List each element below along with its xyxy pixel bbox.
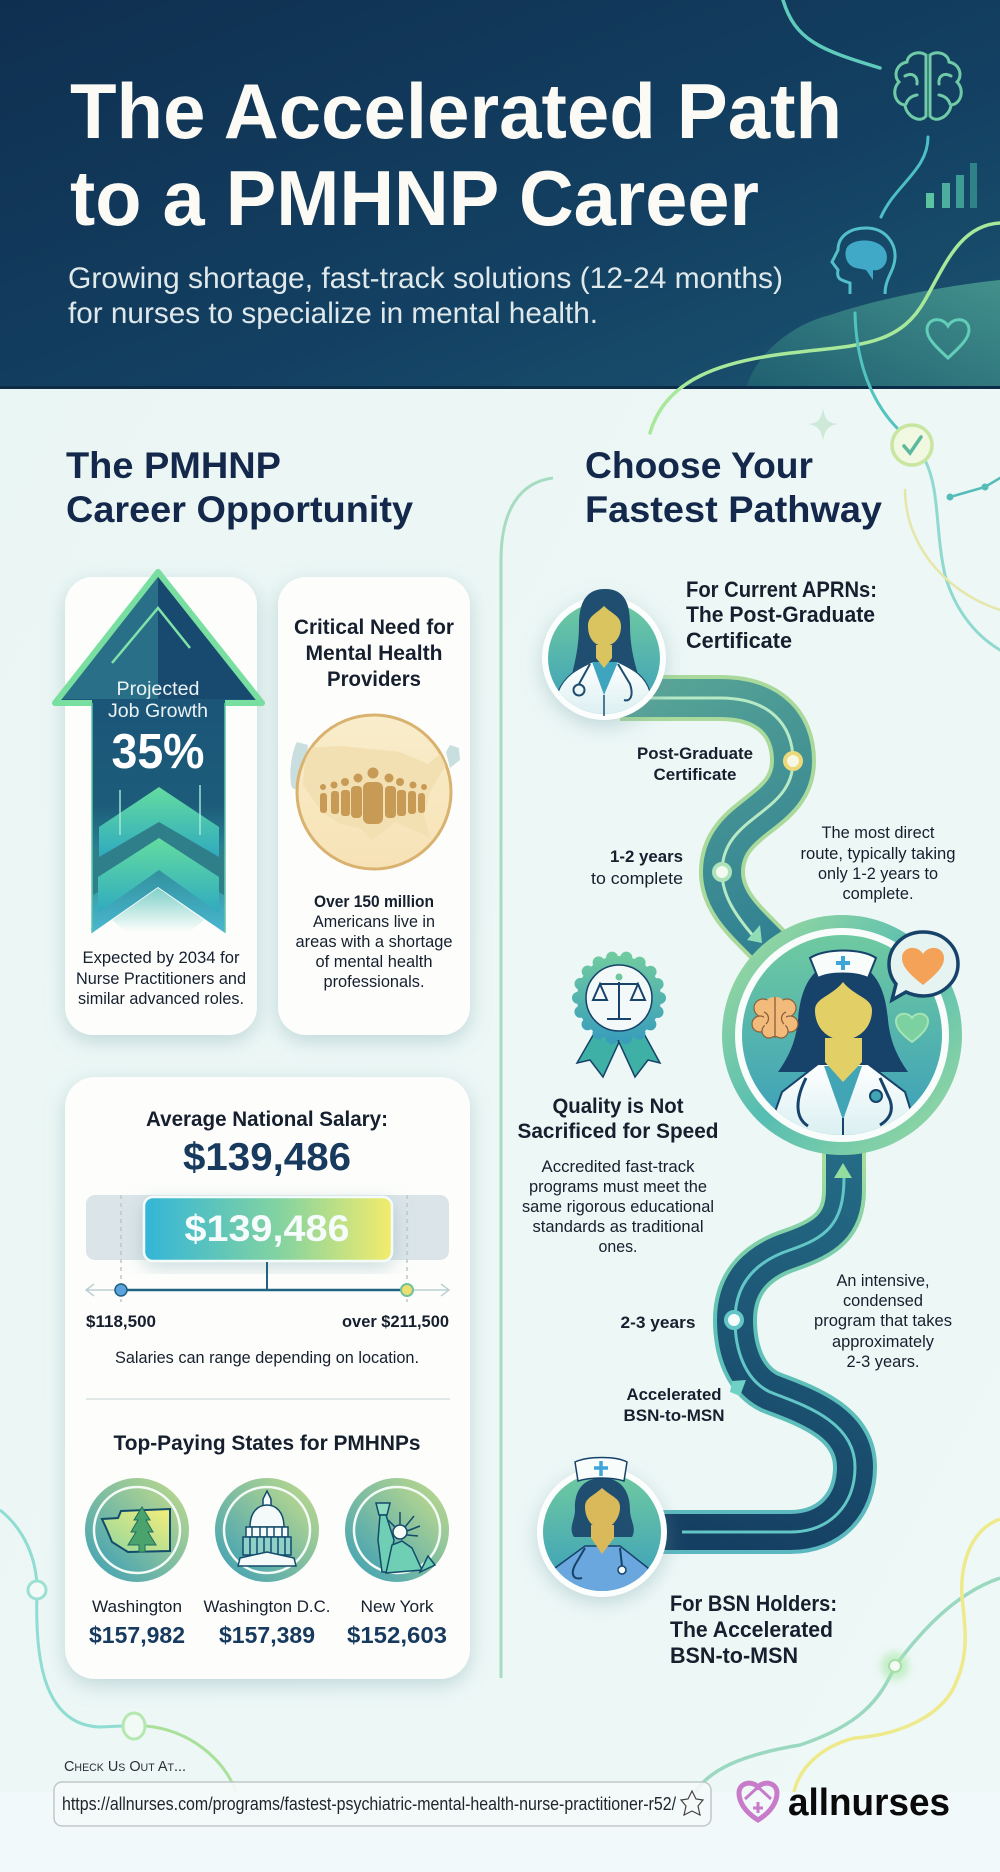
Washington label: $157,982 [89,1622,185,1648]
icon: BSN nurse avatar [537,1458,667,1600]
critical need caption: Americans live in [313,912,435,931]
APRN description: The most direct [822,824,935,842]
road: BSN path [655,1150,855,1532]
heading: BSN pathway: For BSN Holders: [670,1591,837,1616]
road: APRN path [620,698,801,955]
subtitle: Growing shortage, fast-track solutions (12-24 months) [68,262,783,295]
BSN description: program that takes [814,1312,952,1330]
heading: BSN pathway: The Accelerated [670,1617,833,1642]
arrow label: 35% [112,725,204,779]
icon: quality badge [577,956,661,1077]
icon: heart outline [927,320,969,358]
APRN duration: to complete [591,870,683,888]
footer call to action: Check Us Out At... [64,1758,186,1775]
road markers [726,1163,852,1396]
icon: green heart [896,1014,928,1042]
subtitle: for nurses to specialize in mental health. [68,297,598,330]
APRN duration: 1-2 years [610,848,683,866]
Washington D.C. label: $157,389 [219,1622,315,1648]
Washington D.C. label: Washington D.C. [204,1597,330,1616]
road label: BSN: Accelerated [626,1386,722,1404]
critical need caption [296,892,452,991]
column divider line [501,478,553,1678]
state: Washington [85,1478,189,1648]
heading: APRN pathway: The Post-Graduate [686,602,875,627]
heading: choose your fastest pathway: Fastest Pathway [585,489,882,530]
quality description [522,1158,714,1256]
state: New York [345,1478,449,1648]
quality description: Accredited fast-track [542,1158,695,1176]
icon: small connector dots [946,484,988,500]
quality description: programs must meet the [529,1178,707,1196]
BSN description: approximately [832,1333,935,1351]
logo: allnurses: allnurses [788,1782,950,1824]
Washington D.C. label [204,1597,330,1648]
job growth caption: similar advanced roles. [78,989,244,1008]
salary range labels: $118,500 [86,1312,156,1331]
footer background band [0,1792,1000,1872]
decorative nodes [28,1581,909,1739]
BSN description: 2-3 years. [846,1353,920,1371]
icon: check node [892,425,932,465]
icon: head with brain [832,228,895,294]
APRN description [800,824,956,903]
title: The Accelerated Path [70,67,842,155]
critical need heading: Mental Health [306,642,442,665]
road labels: APRN: Certificate [654,766,736,784]
panel: projected job growth card [55,572,262,1035]
road labels: APRN [637,745,753,784]
icon: growth arrow [55,572,262,940]
APRN description: route, typically taking [800,845,956,863]
New York label: $152,603 [347,1622,447,1648]
heading: APRN pathway: Certificate [686,628,792,653]
BSN description: condensed [843,1292,923,1310]
url box [54,1782,711,1826]
heading: choose your fastest pathway [585,445,882,530]
chart: salary range [86,1195,449,1331]
salary heading: $139,486 [183,1136,351,1179]
heading: APRN pathway: For Current APRNs: [686,577,877,602]
salary range labels: over $211,500 [342,1312,449,1331]
icon: star [681,1791,703,1815]
icon: sparkle [808,408,838,441]
panel: salary card [65,1077,470,1679]
critical need caption: areas with a shortage [296,932,452,951]
arrow label: Projected [116,679,200,700]
critical need caption: of mental health [316,952,432,971]
Washington label [89,1597,185,1648]
icon: USA map with people [290,715,460,869]
heading: BSN pathway [670,1591,837,1668]
salary heading [146,1108,388,1179]
critical need heading: Critical Need for [294,616,454,639]
quality heading [518,1095,718,1143]
quality description: standards as traditional [532,1218,704,1236]
salary range labels [86,1312,449,1331]
Washington label: Washington [92,1597,182,1616]
title: to a PMHNP Career [70,154,759,242]
heading: career opportunity: The PMHNP [66,445,281,486]
New York label [347,1597,447,1648]
quality description: same rigorous educational [522,1198,714,1216]
APRN description: only 1-2 years to [818,865,938,883]
road labels: APRN: Post-Graduate [637,745,753,763]
job growth caption: Expected by 2034 for [82,948,240,967]
heading: choose your fastest pathway: Choose Your [585,445,813,486]
road markers [714,753,801,943]
icon: Statue of Liberty [376,1503,435,1573]
APRN description: complete. [842,885,914,903]
icon: brain outline [895,53,961,119]
subtitle [68,262,783,330]
icon: APRN doctor avatar [542,589,666,720]
salary heading: Average National Salary: [146,1108,388,1131]
icon: heart logo [739,1783,777,1820]
quality heading: Quality is Not [552,1095,684,1118]
state: Washington D.C. [204,1478,330,1648]
BSN duration: 2-3 years [620,1314,696,1332]
panel: header banner [0,0,1000,389]
title [70,67,842,242]
icon: signal bars [926,163,977,208]
decorative flowing lines bottom [0,1510,1000,1792]
chart: salary range: $139,486 [184,1208,350,1249]
icon: Washington state with tree [102,1507,170,1552]
BSN description [814,1272,952,1371]
road label: BSN [624,1386,724,1425]
decorative flowing lines top right [650,0,1000,650]
top-paying heading: Top-Paying States for PMHNPs [114,1432,420,1455]
APRN duration [591,848,683,888]
salary note: Salaries can range depending on location. [115,1348,419,1367]
New York label: New York [360,1597,434,1616]
icon: Capitol dome [238,1491,296,1566]
critical need heading: Providers [327,668,421,691]
critical need caption: Over 150 million [314,892,434,911]
job growth caption [76,948,246,1008]
critical need caption: professionals. [324,972,424,991]
icon: speech bubble heart [889,932,958,1000]
BSN description: An intensive, [836,1272,930,1290]
quality heading: Sacrificed for Speed [518,1120,718,1143]
panel: critical need card [278,577,470,1035]
heading: APRN pathway [686,577,877,653]
quality description: ones. [598,1238,638,1256]
arrow label: Job Growth [108,701,208,722]
heading: career opportunity: Career Opportunity [66,489,413,530]
road label: BSN: BSN-to-MSN [624,1407,724,1425]
arrow label [108,679,208,779]
icon: central nurse [722,915,962,1155]
url box: https://allnurses.com/programs/fastest-psychiatric-mental-health-nurse-practitioner-r52/ [62,1794,676,1814]
heading: career opportunity [66,445,413,530]
heading: BSN pathway: BSN-to-MSN [670,1643,798,1668]
critical need heading [294,616,454,691]
icon: orange brain [752,997,798,1038]
job growth caption: Nurse Practitioners and [76,969,246,988]
